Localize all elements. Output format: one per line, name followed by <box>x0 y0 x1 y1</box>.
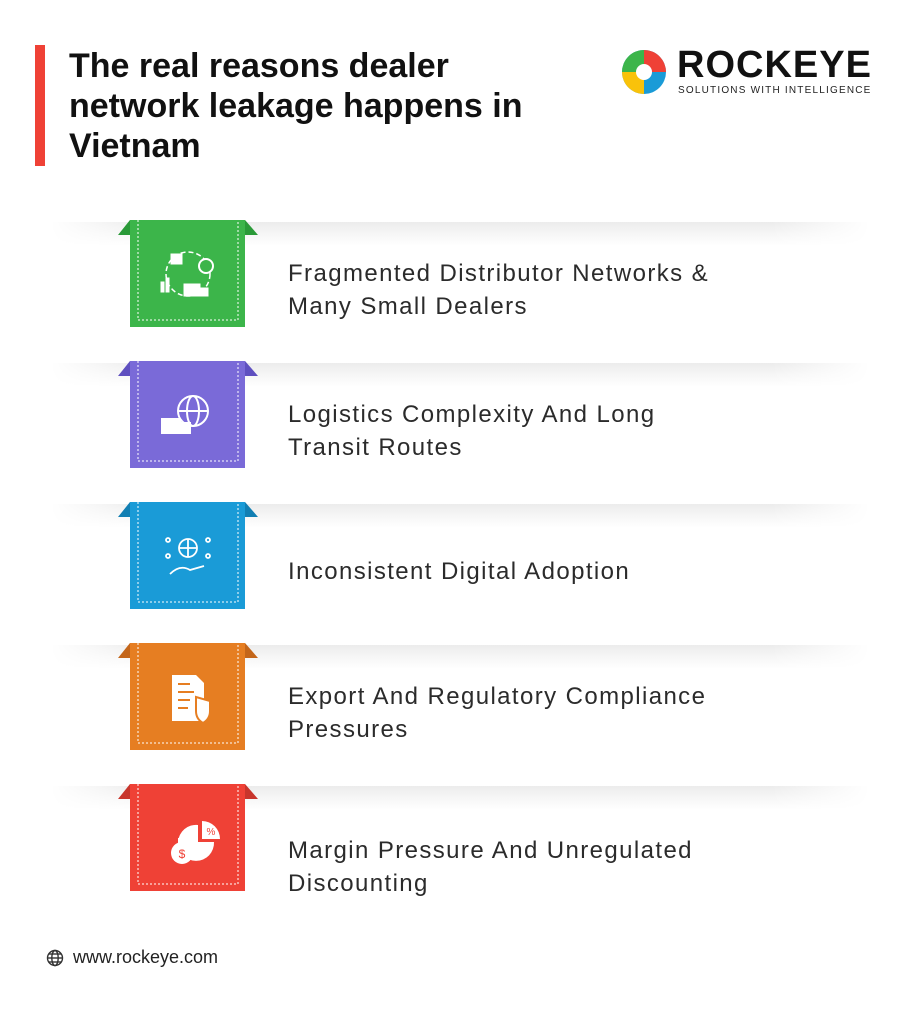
icon <box>162 396 208 433</box>
text: Fragmented Distributor Networks & <box>288 260 709 287</box>
text <box>288 683 706 743</box>
text: Transit Routes <box>288 434 463 461</box>
row 4 <box>94 643 826 750</box>
text: Discounting <box>288 870 429 897</box>
icon <box>161 252 213 296</box>
logo icon <box>622 50 666 94</box>
logo <box>622 44 872 96</box>
text <box>288 401 655 461</box>
text: Logistics Complexity And Long <box>288 401 655 428</box>
text: Pressures <box>288 716 409 743</box>
text <box>288 260 709 320</box>
footer: website: www.rockeye.com <box>73 947 218 967</box>
text: Export And Regulatory Compliance <box>288 683 706 710</box>
text: Many Small Dealers <box>288 293 528 320</box>
icon: globe <box>46 950 64 966</box>
text: Margin Pressure And Unregulated <box>288 837 693 864</box>
tag: orange <box>118 643 258 750</box>
tag: green <box>118 220 258 327</box>
tag: purple <box>118 361 258 468</box>
title: The real reasons dealer network leakage happens in Vietnam <box>69 47 522 165</box>
icon: $ <box>179 847 186 861</box>
tag: blue <box>118 502 258 609</box>
row 1 <box>94 220 826 327</box>
row 3 <box>94 502 826 609</box>
icon: % <box>207 827 216 838</box>
row 5 <box>94 784 826 897</box>
title accent bar <box>35 45 45 166</box>
icon <box>172 675 210 723</box>
text: Inconsistent Digital Adoption <box>288 558 630 585</box>
logo: SOLUTIONS WITH INTELLIGENCE <box>678 85 872 96</box>
icon <box>171 821 220 864</box>
text <box>288 837 693 897</box>
tag: red <box>118 784 258 891</box>
icon <box>166 538 210 574</box>
logo text: ROCKEYE <box>677 44 872 86</box>
row 2 <box>94 361 826 468</box>
